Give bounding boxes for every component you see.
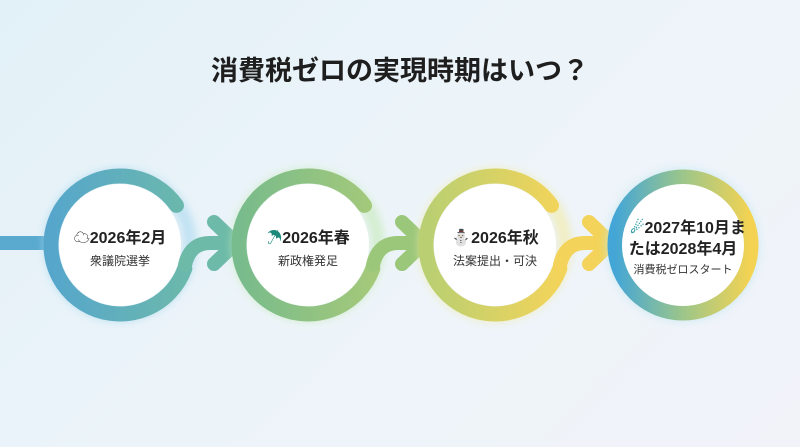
start line (0, 236, 50, 250)
step 3: ⛄2026年秋 (451, 228, 539, 247)
step 3: 法案提出・可決 (453, 253, 537, 268)
arrow 1 (185, 222, 236, 265)
step 4: ☄2027年10月ま (630, 218, 746, 237)
step 1 (50, 175, 190, 315)
title: 消費税ゼロの実現時期はいつ？ (211, 55, 589, 86)
arrow 2 (373, 222, 424, 265)
arrow 3 (560, 222, 611, 265)
step 1: 衆議院選挙 (90, 254, 150, 268)
step 4: たは2028年4月 (629, 239, 737, 258)
step 4: 消費税ゼロスタート (634, 262, 732, 276)
step 2: 新政権発足 (278, 253, 338, 268)
step 2 (238, 175, 378, 315)
step 2: ☂2026年春 (266, 228, 350, 247)
step 4 (613, 175, 753, 315)
step 3 (425, 175, 565, 315)
step 1: ☁2026年2月 (74, 228, 166, 247)
